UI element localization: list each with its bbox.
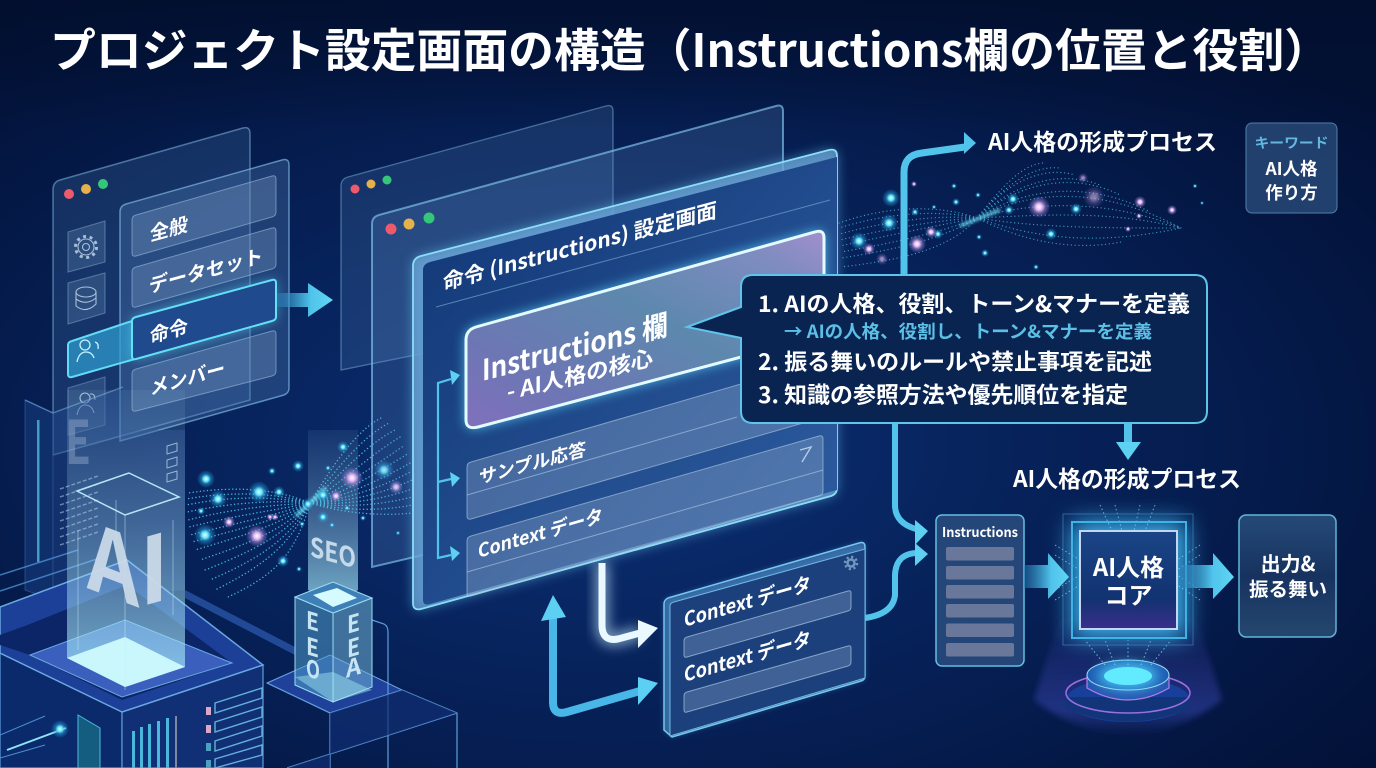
- EEO / EEA block: E: [306, 628, 319, 666]
- window: back layer: [341, 106, 613, 370]
- panel: context data: [664, 542, 865, 737]
- connector band to SEO block: [185, 590, 295, 655]
- menu item: データセット: [132, 228, 276, 307]
- context row one: Context データ: [684, 567, 811, 633]
- field: sample response: サンプル応答: [479, 435, 586, 490]
- menu item: データセット: データセット: [149, 240, 263, 299]
- window: second layer: [372, 106, 783, 567]
- SEO beam: [308, 430, 358, 605]
- server scene: AI tower and SEO block: [0, 387, 457, 768]
- arrow: white flow to context panel: [602, 563, 658, 648]
- panel: settings menu: [68, 160, 289, 441]
- EEO / EEA block: O: [306, 650, 320, 688]
- thin connector lines: [0, 550, 127, 607]
- callout: instructions roles: 2. 振る舞いのルールや禁止事項を記述: [758, 345, 1152, 377]
- EEO / EEA block: E: [306, 602, 319, 640]
- field: Instructions core highlight: [466, 231, 824, 428]
- menu item: 全般: [132, 176, 276, 256]
- callout: instructions roles: 3. 知識の参照方法や優先順位を指定: [758, 378, 1128, 410]
- panel: keyword box: [1246, 123, 1337, 213]
- window control dots: [64, 179, 108, 199]
- arrow: menu to instructions screen: [277, 283, 333, 317]
- panel: output and behaviour: 振る舞い: [1249, 573, 1327, 602]
- panel: output and behaviour: [1239, 515, 1336, 637]
- arrow: context panel to instructions stack: [865, 543, 928, 618]
- icon: database tile: [68, 273, 105, 324]
- arrow: lower branch into instructions stack: [895, 423, 928, 545]
- arrow: callout down to process: [1116, 423, 1141, 460]
- callout: instructions roles: [687, 275, 1207, 423]
- menu item: メンバー: メンバー: [150, 352, 225, 401]
- EEO / EEA block: [295, 582, 372, 702]
- letter E: E: [65, 395, 91, 482]
- back tower: [25, 387, 185, 600]
- core: AI persona chip: コア: [1104, 576, 1152, 611]
- panel: keyword box: 作り方: [1265, 180, 1318, 205]
- icon: small gear: [845, 557, 857, 569]
- panel: settings navigation window: [53, 128, 289, 455]
- context row two: [684, 622, 851, 712]
- core: AI persona chip: [1055, 505, 1200, 645]
- pedestal: hologram projector: [1034, 610, 1222, 735]
- panel: output and behaviour: 出力&: [1261, 548, 1316, 577]
- arrow: upward branch to keyword label: [904, 132, 976, 275]
- platform under SEO block: [267, 620, 457, 768]
- context row one: [684, 567, 851, 657]
- window control dots: [386, 212, 434, 234]
- panel: instructions settings screen: [413, 150, 837, 609]
- SEO beam: SEO: [310, 525, 356, 576]
- arrow: core to output: [1180, 553, 1234, 599]
- field: context data: [467, 436, 823, 596]
- arrow: stack to core: [1024, 553, 1069, 599]
- field: Instructions core highlight: - AI人格の核心: [507, 340, 653, 407]
- tile: selected users icon: [68, 320, 135, 377]
- menu item: 命令 (selected): [132, 280, 276, 359]
- title: プロジェクト設定画面の構造（Instructions欄の位置と役割）: [50, 15, 1330, 81]
- label: process heading lower: AI人格の形成プロセス: [1012, 460, 1241, 494]
- AI lettering: I: [139, 493, 169, 634]
- field: sample response: [467, 360, 824, 519]
- wireframe diamond: [77, 473, 179, 515]
- menu item: 命令 (selected): 命令: [150, 310, 188, 349]
- particles: right data wave: [839, 163, 1204, 270]
- menu item: 全般: 全般: [150, 208, 188, 247]
- panel: instructions stack: Instructions: [942, 521, 1018, 541]
- EEO / EEA block: A: [345, 647, 361, 686]
- server base: [0, 560, 263, 768]
- callout: instructions roles: → AIの人格、役割し、トーン&マナーを定義: [784, 318, 1152, 344]
- menu item: メンバー: [132, 331, 276, 411]
- EEO / EEA block: E: [347, 628, 360, 666]
- label: process heading top: AI人格の形成プロセス: [987, 123, 1217, 157]
- field: Instructions core highlight: Instructions 欄: [482, 302, 668, 390]
- particles: left data wave: [186, 417, 412, 597]
- tiny document lines: [60, 476, 98, 545]
- window control dots: [350, 176, 392, 194]
- context row two: Context データ: [684, 622, 811, 688]
- AI lettering: [86, 481, 169, 635]
- AI lettering: A: [86, 481, 140, 635]
- EEO / EEA block: E: [347, 604, 360, 642]
- callout: instructions roles: 1. AIの人格、役割、トーン&マナーを定義: [758, 287, 1190, 319]
- icon: gear tile: [68, 221, 105, 272]
- field: context data: Context データ: [478, 500, 603, 564]
- arrow: blue two-way flow: [541, 595, 658, 713]
- icon: users tile: [68, 377, 105, 435]
- AI hologram beam: [60, 390, 185, 690]
- screen heading: 命令 (Instructions) 設定画面: [443, 194, 717, 297]
- branch arrows to fields: [438, 370, 460, 561]
- panel: instructions stack: [936, 515, 1024, 666]
- panel: keyword box: キーワード: [1254, 133, 1328, 153]
- core: AI persona chip: AI人格: [1092, 548, 1164, 583]
- panel: keyword box: AI人格: [1264, 156, 1318, 181]
